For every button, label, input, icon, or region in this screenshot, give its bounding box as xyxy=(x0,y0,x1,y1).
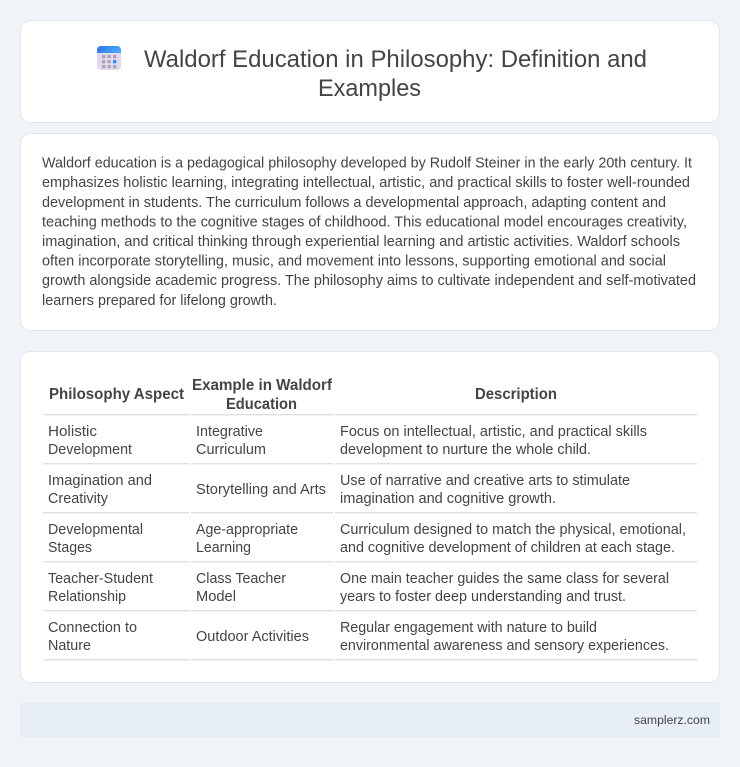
table row: Connection to Nature xyxy=(48,620,669,654)
table header xyxy=(49,377,557,413)
table row: Developmental Stages xyxy=(48,522,686,556)
text block: introduction: learners prepared for lifelong growth. xyxy=(42,293,277,309)
table row: Imagination and Creativity xyxy=(48,473,630,507)
table row: Teacher-Student Relationship: years to foster deep understanding and trust. xyxy=(340,589,626,605)
table row: Teacher-Student Relationship xyxy=(48,571,669,605)
table row: Imagination and Creativity: Use of narrative and creative arts to stimulate xyxy=(340,473,630,489)
table row: Imagination and Creativity: Storytelling and Arts xyxy=(196,482,326,498)
table row: Developmental Stages: Stages xyxy=(48,540,92,556)
footer source text: samplerz.com xyxy=(634,713,710,727)
table row: Developmental Stages: and cognitive development of children at each stage. xyxy=(340,540,675,556)
table row: Holistic Development: Development xyxy=(48,442,132,458)
title: Waldorf Education in Philosophy: Definition and xyxy=(144,46,647,73)
table row: Teacher-Student Relationship: Teacher-Student xyxy=(48,571,153,587)
table row: Teacher-Student Relationship: Relationship xyxy=(48,589,126,605)
table header: Education xyxy=(226,396,297,413)
footer bar xyxy=(20,703,720,737)
table row: Teacher-Student Relationship: One main teacher guides the same class for several xyxy=(340,571,669,587)
table header: Description xyxy=(475,386,557,403)
text block: introduction: emphasizes holistic learning, integrating intellectual, artistic, and practical skills to foster well-rounded xyxy=(42,175,690,191)
table row: Connection to Nature: Connection to xyxy=(48,620,137,636)
table row: Connection to Nature: Regular engagement with nature to build xyxy=(340,620,597,636)
table row: Connection to Nature: Outdoor Activities xyxy=(196,629,309,645)
table row: Holistic Development: Curriculum xyxy=(196,442,266,458)
table row: Developmental Stages: Curriculum designed to match the physical, emotional, xyxy=(340,522,686,538)
table row: Developmental Stages: Learning xyxy=(196,540,251,556)
table row: Developmental Stages: Developmental xyxy=(48,522,143,538)
table row: Holistic Development xyxy=(48,424,647,458)
text block: introduction: imagination, and critical thinking through experiential learning and artistic activities. Waldorf schools xyxy=(42,234,680,250)
text block: introduction: often incorporate storytelling, music, and movement into lessons, supporting emotional and social xyxy=(42,254,666,270)
icon: calendar xyxy=(97,46,121,70)
table row: Developmental Stages: Age-appropriate xyxy=(196,522,298,538)
panel: intro paragraph xyxy=(20,134,720,330)
text block: introduction xyxy=(42,156,696,309)
table row: Teacher-Student Relationship: Class Teacher xyxy=(196,571,286,587)
table row: Imagination and Creativity: Creativity xyxy=(48,491,109,507)
text block: introduction: Waldorf education is a pedagogical philosophy developed by Rudolf Steiner in the early 20th century. It xyxy=(42,156,692,172)
panel: comparison table xyxy=(20,352,720,682)
table header: Example in Waldorf xyxy=(192,377,333,394)
table row: Teacher-Student Relationship: Model xyxy=(196,589,236,605)
title: Examples xyxy=(318,75,421,102)
text block: introduction: growth alongside academic progress. The philosophy aims to cultivate independent and self-motivated xyxy=(42,273,696,289)
table row: Connection to Nature: environmental awareness and sensory experiences. xyxy=(340,638,669,654)
text block: introduction: development in students. The curriculum follows a developmental approach, adapting content and xyxy=(42,195,666,211)
table row: Connection to Nature: Nature xyxy=(48,638,91,654)
panel: title card xyxy=(20,20,720,122)
table row: Holistic Development: development to nurture the whole child. xyxy=(340,442,591,458)
table row: Holistic Development: Focus on intellectual, artistic, and practical skills xyxy=(340,424,647,440)
table row: Imagination and Creativity: imagination and cognitive growth. xyxy=(340,491,556,507)
table header: Philosophy Aspect xyxy=(49,386,184,403)
table row: Imagination and Creativity: Imagination and xyxy=(48,473,152,489)
table row: Holistic Development: Holistic xyxy=(48,424,97,440)
title xyxy=(144,46,647,102)
text block: introduction: teaching methods to the cognitive stages of childhood. This educational model encourages creativity, xyxy=(42,214,687,230)
table row: Holistic Development: Integrative xyxy=(196,424,263,440)
